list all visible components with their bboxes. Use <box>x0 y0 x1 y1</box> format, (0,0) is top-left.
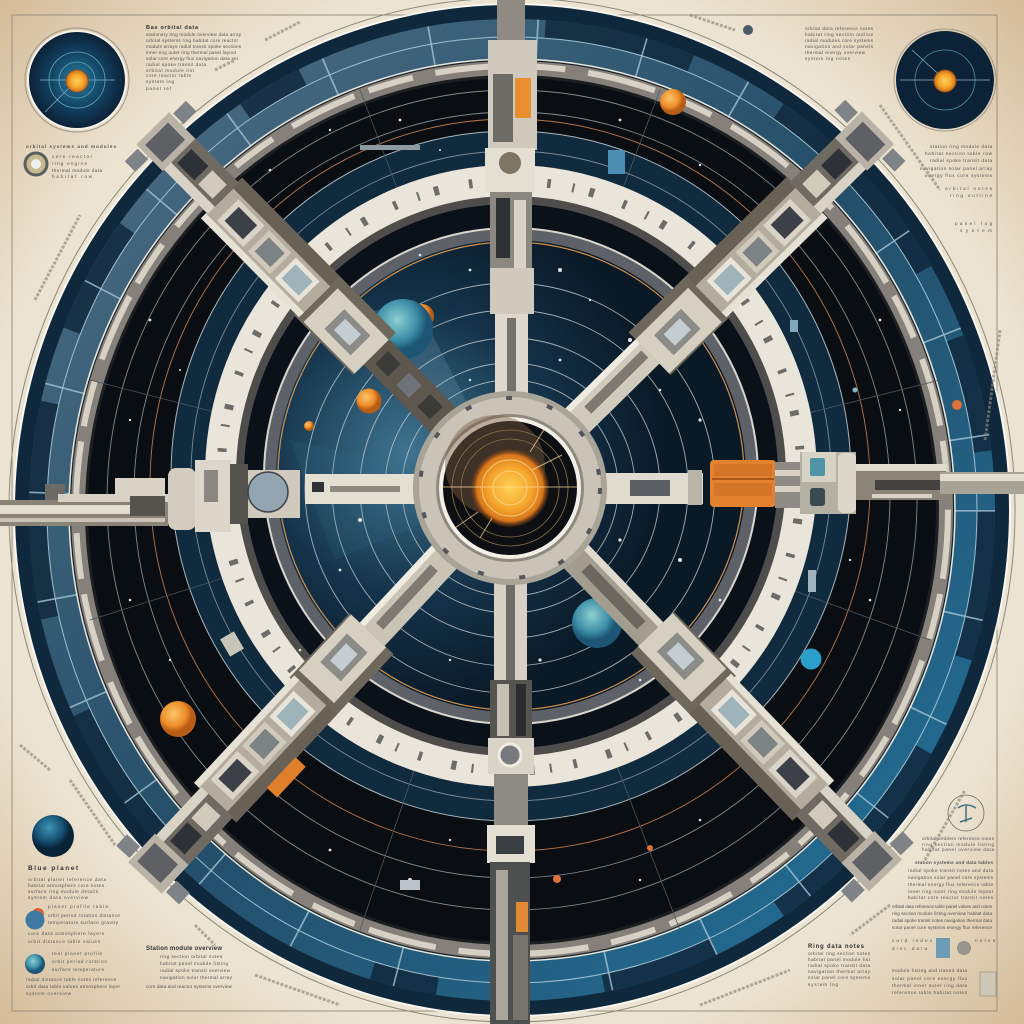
beam: lower right <box>560 541 682 665</box>
text block top left: radial spoke transit data <box>146 62 206 67</box>
text block top right: radial modules core systems <box>805 38 874 43</box>
text block lower right: disc data <box>892 946 927 951</box>
text block right upper: habitat section table row <box>925 151 993 156</box>
text block right upper: energy flux core systems <box>925 173 993 178</box>
orange module on lower left arm <box>267 757 306 797</box>
white data ring <box>221 181 801 771</box>
planet: small red dots <box>553 400 962 883</box>
text block top right: orbital data reference notes <box>805 26 874 31</box>
dial top right <box>894 29 996 131</box>
icon: small red and blue planet <box>26 908 44 930</box>
planet: teal with orange moon <box>373 299 434 359</box>
text block lower right: radial spoke transit notes and data <box>908 868 993 873</box>
text block lower left: system overview <box>26 991 72 996</box>
text block lower left: surface ring module details <box>28 889 99 894</box>
navy strip outside white ring <box>171 131 851 821</box>
text block lower right: ring section module listing <box>922 842 994 847</box>
text block lower left: temperature surface gravity <box>48 920 119 925</box>
text block lower middle: ring section orbital notes <box>160 954 223 959</box>
dial top left <box>25 28 129 132</box>
text block lower right: module listing and transit data <box>892 968 967 973</box>
text block lower left: planet profile table <box>48 904 108 909</box>
text block lower left: teal planet profile <box>52 951 102 956</box>
text block lower left: orbit period rotation <box>52 959 107 964</box>
text block lower right: radial spoke transit notes navigation thermal data <box>892 918 992 923</box>
text block lower middle: habitat panel module listing <box>160 961 228 966</box>
planet: orange lower left <box>160 701 196 737</box>
text block lower middle: navigation solar thermal array <box>160 975 233 980</box>
text block lower left: orbital planet reference data <box>28 877 106 882</box>
text block lower left: orbit distance table values <box>28 939 101 944</box>
arm: upper right <box>619 97 908 384</box>
text block lower right centre: habitat panel module list <box>808 957 871 962</box>
black starfield zone <box>88 78 936 942</box>
text block upper left caption: ring engine <box>52 161 87 166</box>
text block lower middle: radial spoke transit overview <box>160 968 231 973</box>
text block right upper: orbital notes <box>945 186 993 191</box>
inner grey ring <box>270 234 752 718</box>
text block lower right: solar panel core systems energy flux reference <box>892 925 992 930</box>
text block lower right: navigation solar panel core systems <box>908 875 994 880</box>
text block lower right: inner ring outer ring module layout <box>908 889 994 894</box>
text block lower right: habitat core reactor transit notes <box>908 895 994 900</box>
text block lower right: solar panel core energy flux <box>892 976 968 981</box>
text block right upper <box>920 144 993 233</box>
text block lower right: orbital data reference table panel values and notes <box>892 904 993 909</box>
light wedge <box>340 300 510 488</box>
core sun <box>471 449 549 527</box>
text block right upper: radial spoke transit data <box>930 158 992 163</box>
beam: lower left <box>340 542 460 667</box>
text block lower right centre: solar panel core systems <box>808 975 871 980</box>
text block right upper: navigation solar panel array <box>920 166 993 171</box>
grey mechanical ring <box>80 70 944 950</box>
text block lower right: habitat panel overview data <box>922 847 994 852</box>
icon: teal planet <box>25 954 45 974</box>
text block lower middle <box>146 946 233 989</box>
text block top right: system log notes <box>805 56 851 61</box>
text block lower right: ring section module listing overview habitat data <box>892 911 992 916</box>
text block lower left: system data overview <box>28 895 89 900</box>
text block lower left: orbit data table values atmosphere layer <box>26 984 120 989</box>
text block top left: system log <box>146 79 174 84</box>
text block lower left: core data atmosphere layers <box>28 931 105 936</box>
planet: small orange <box>304 421 314 431</box>
icon: blue card <box>936 938 950 958</box>
planet: teal lower <box>572 598 622 648</box>
text block lower right centre: navigation thermal array <box>808 969 871 974</box>
text block right upper: system <box>960 228 992 233</box>
text block top right: navigation and solar panels <box>805 44 874 49</box>
planet: blue globe lower left <box>32 815 74 857</box>
text block upper left caption: habitat row <box>52 174 93 179</box>
text block top left: module arrays radial transit spoke sections <box>146 44 242 49</box>
stars and debris <box>129 25 901 890</box>
text block lower right: notes <box>975 938 996 943</box>
text block top left <box>146 25 242 91</box>
text block lower right centre: system log <box>808 982 838 987</box>
text block top right: habitat ring section outline <box>805 32 873 37</box>
text block lower left <box>26 865 120 996</box>
planet: orange inner <box>356 388 382 414</box>
vertical arm top <box>485 0 537 394</box>
text block top left: panel ref <box>146 86 172 91</box>
beam: upper right <box>562 314 685 436</box>
text block top left: inner ring outer ring thermal panel layout <box>146 50 237 55</box>
arm: lower left <box>114 605 404 907</box>
text block lower right: station systems and data tables <box>915 860 993 865</box>
beam: upper left <box>329 304 460 436</box>
text block lower right: thermal energy flux reference table <box>908 882 993 887</box>
text block lower right centre: radial spoke transit data <box>808 963 870 968</box>
icon: grey disc <box>957 941 971 955</box>
text block upper left caption: core reactor <box>52 154 92 159</box>
arm: lower right <box>621 603 916 905</box>
horizontal arm right <box>598 452 1024 514</box>
text block lower left: orbit period rotation distance <box>48 913 120 918</box>
under ring shadow <box>237 197 785 755</box>
text block lower middle: core data and reactor systems overview <box>146 984 233 989</box>
text block lower left: radial distance table notes reference <box>26 977 116 982</box>
text block lower right: card index <box>892 938 933 943</box>
planet: cyan <box>800 648 822 670</box>
text block lower right: orbital emblem reference notes <box>922 836 995 841</box>
text block upper left caption <box>26 144 116 179</box>
text block upper left caption: thermal module data <box>52 168 102 173</box>
text block top left: orbital systems ring habitat core reactor <box>146 38 238 43</box>
planet: orange top <box>660 89 686 115</box>
text block lower right centre <box>808 944 871 987</box>
text block right upper: station ring module data <box>930 144 992 149</box>
text block upper left caption: orbital systems and modules <box>26 144 116 149</box>
text block top left: stationary ring module overview data array <box>146 32 242 37</box>
text block top left: orbital module list <box>146 68 195 73</box>
text block lower right <box>892 836 996 995</box>
horizontal arm left <box>0 460 415 532</box>
text block top left: core reactor table <box>146 73 191 78</box>
text block top left: Bas orbital data <box>146 25 199 31</box>
text block right upper: panel log <box>955 221 992 226</box>
central hub <box>413 391 607 585</box>
icon: engine ring <box>25 153 47 175</box>
text block lower left: surface temperature <box>52 967 104 972</box>
text block top right: thermal energy overview <box>805 50 866 55</box>
icon: emblem lower right <box>948 795 984 831</box>
text block lower middle: Station module overview <box>146 946 222 952</box>
diagonal arms <box>114 97 916 907</box>
text block lower right centre: orbital ring section notes <box>808 951 871 956</box>
text block lower right: reference table habitat notes <box>892 990 968 995</box>
icon: schematic <box>980 972 996 996</box>
arm: upper left <box>122 98 406 383</box>
text block lower right: thermal inner outer ring data <box>892 983 967 988</box>
vertical arm bottom <box>487 580 535 1024</box>
text block right upper: ring outline <box>950 193 992 198</box>
text block lower left: Blue planet <box>28 865 79 872</box>
text block top left: solar core energy flux navigation data set <box>146 56 239 61</box>
text block top right <box>805 26 874 61</box>
text block lower left: habitat atmosphere core notes <box>28 883 105 888</box>
text block lower right centre: Ring data notes <box>808 944 865 950</box>
